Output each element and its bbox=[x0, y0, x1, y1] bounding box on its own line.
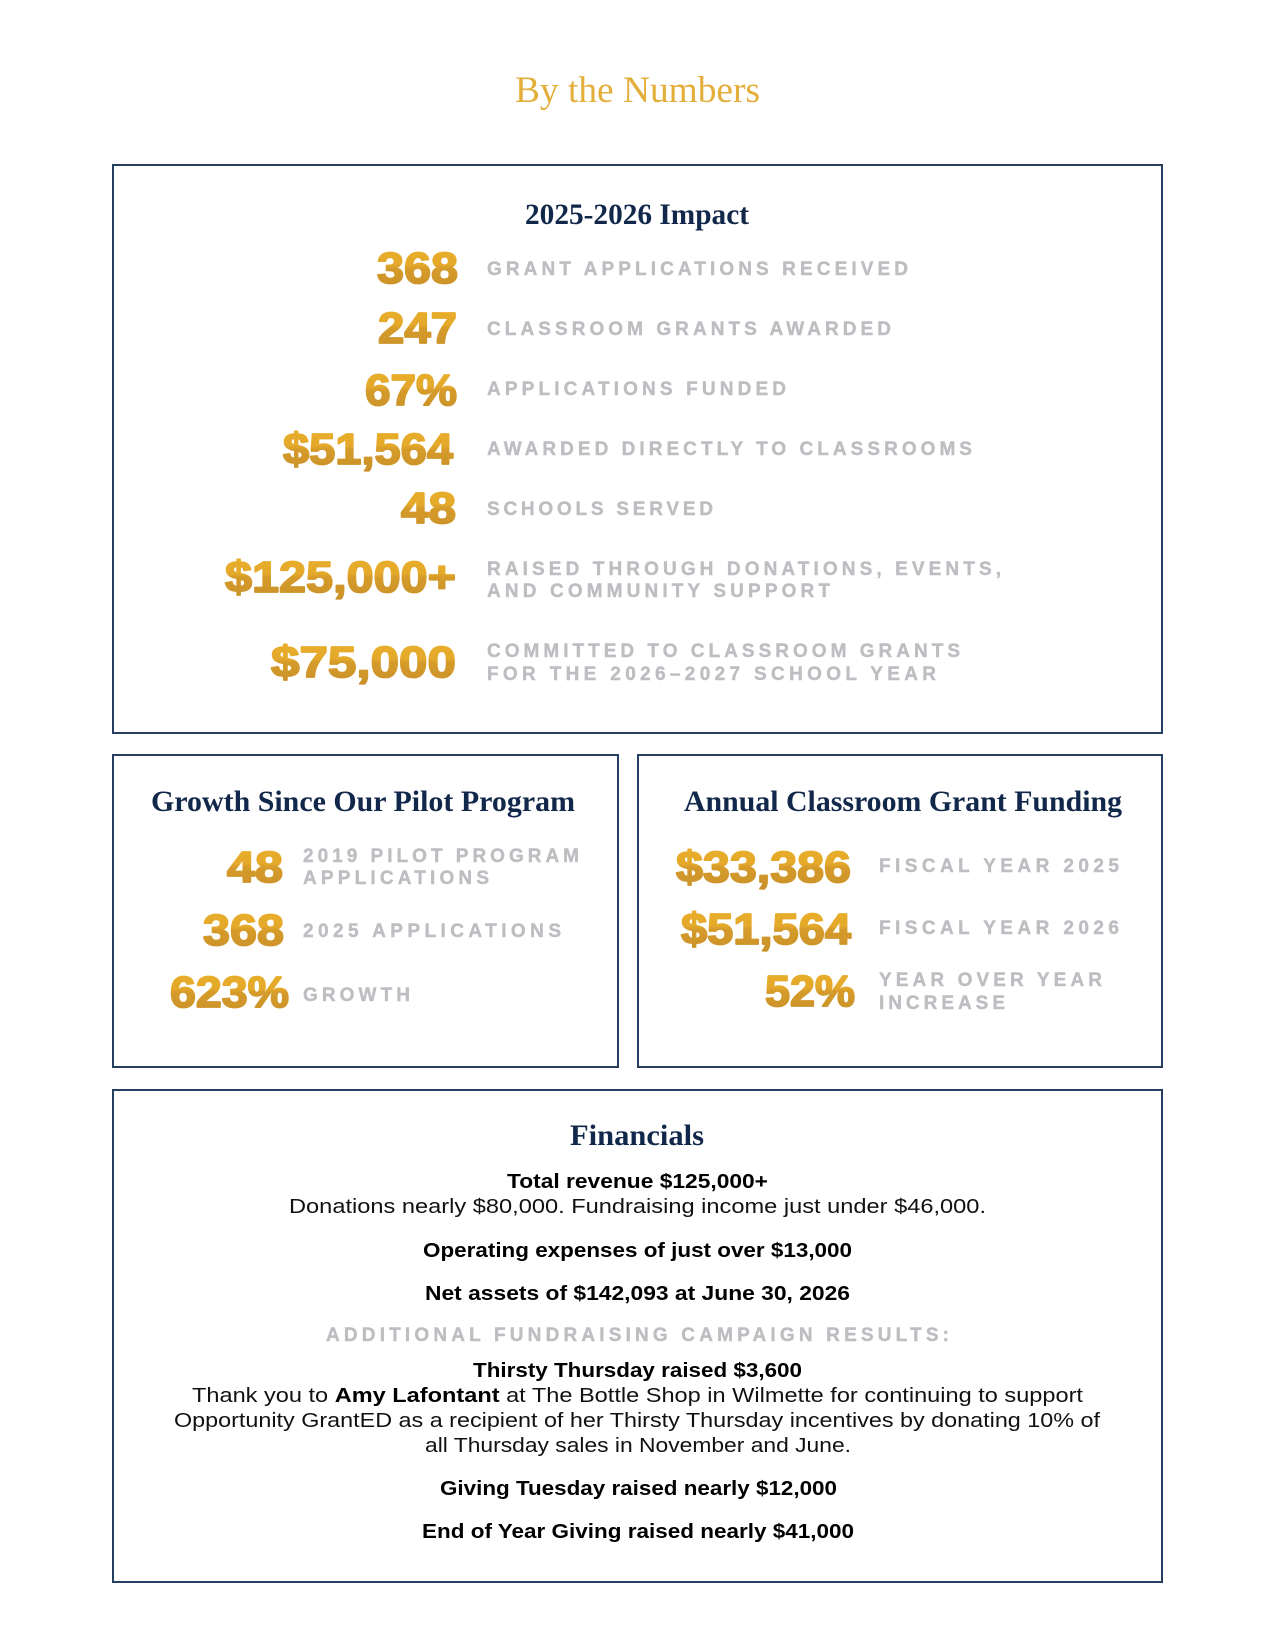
total revenue bbox=[289, 1170, 986, 1218]
heading: financials: Financials bbox=[570, 1119, 704, 1152]
stat: 48 pilot applications: 48 bbox=[227, 843, 283, 892]
stat: $125,000+ raised: $125,000+ bbox=[225, 553, 456, 602]
stat: year over year increase: 52% bbox=[765, 967, 855, 1016]
stat: fiscal year 2026: FISCAL YEAR 2026 bbox=[879, 918, 1119, 939]
stat: $75,000 committed: FOR THE 2026–2027 SCHOOL YEAR bbox=[487, 664, 936, 685]
stat: $51,564 awarded: $51,564 bbox=[283, 425, 454, 474]
stat: year over year increase: INCREASE bbox=[879, 993, 1005, 1014]
stat: 48 pilot applications: 2019 PILOT PROGRAM bbox=[303, 846, 579, 867]
total revenue: Donations nearly $80,000. Fundraising income just under $46,000. bbox=[289, 1195, 986, 1218]
stat: 368 applications bbox=[377, 244, 908, 293]
subheading: additional campaigns: ADDITIONAL FUNDRAISING CAMPAIGN RESULTS: bbox=[326, 1325, 949, 1346]
stat: 67% funded: 67% bbox=[365, 366, 457, 415]
stat: 67% funded: APPLICATIONS FUNDED bbox=[487, 379, 786, 400]
stat: 48 pilot applications bbox=[227, 843, 579, 892]
title: By the Numbers bbox=[515, 70, 760, 111]
stat: 48 pilot applications: APPLICATIONS bbox=[303, 868, 489, 889]
stat: $51,564 awarded: AWARDED DIRECTLY TO CLASSROOMS bbox=[487, 439, 972, 460]
operating expenses: Operating expenses of just over $13,000 bbox=[423, 1239, 852, 1262]
stat: $75,000 committed: COMMITTED TO CLASSROOM GRANTS bbox=[487, 641, 960, 662]
stat: 368 applications bbox=[203, 906, 561, 955]
thirsty thursday: all Thursday sales in November and June. bbox=[425, 1434, 851, 1457]
panel: 2025-2026 impact bbox=[113, 165, 1162, 733]
stat: 48 schools: 48 bbox=[401, 484, 456, 533]
stat: 623% growth: GROWTH bbox=[303, 985, 410, 1006]
stat: 368 applications: 368 bbox=[203, 906, 284, 955]
panel: growth since pilot bbox=[113, 755, 618, 1067]
end of year giving: End of Year Giving raised nearly $41,000 bbox=[422, 1520, 854, 1543]
stat: 623% growth: 623% bbox=[170, 968, 289, 1017]
stat: 67% funded bbox=[365, 366, 786, 415]
stat: $75,000 committed: $75,000 bbox=[271, 638, 456, 687]
stat: 368 applications: 2025 APPLICATIONS bbox=[303, 921, 561, 942]
stat: year over year increase: YEAR OVER YEAR bbox=[879, 970, 1102, 991]
stat: fiscal year 2025: FISCAL YEAR 2025 bbox=[879, 856, 1119, 877]
stat: fiscal year 2025: $33,386 bbox=[676, 843, 851, 892]
stat: fiscal year 2026 bbox=[681, 905, 1119, 954]
total revenue: Total revenue $125,000+ bbox=[507, 1170, 768, 1193]
stat: 247 grants: CLASSROOM GRANTS AWARDED bbox=[487, 319, 891, 340]
thirsty thursday: Opportunity GrantED as a recipient of her Thirsty Thursday incentives by donating 10% of bbox=[174, 1409, 1100, 1432]
heading: growth: Growth Since Our Pilot Program bbox=[151, 785, 575, 818]
thirsty thursday bbox=[174, 1359, 1100, 1457]
stat: 368 applications: GRANT APPLICATIONS RECEIVED bbox=[487, 259, 908, 280]
stat: $125,000+ raised bbox=[225, 553, 1001, 602]
stat: $125,000+ raised: RAISED THROUGH DONATIONS, EVENTS, bbox=[487, 559, 1001, 580]
stat: $75,000 committed bbox=[271, 638, 960, 687]
stat: $51,564 awarded bbox=[283, 425, 972, 474]
stat: 247 grants bbox=[378, 304, 891, 353]
heading: funding: Annual Classroom Grant Funding bbox=[684, 785, 1122, 818]
stat: $125,000+ raised: AND COMMUNITY SUPPORT bbox=[487, 581, 830, 602]
stat: 247 grants: 247 bbox=[378, 304, 457, 353]
stat: fiscal year 2025 bbox=[676, 843, 1119, 892]
panel: financials bbox=[113, 1090, 1162, 1582]
stat: fiscal year 2026: $51,564 bbox=[681, 905, 852, 954]
heading: impact: 2025-2026 Impact bbox=[525, 198, 749, 231]
thirsty thursday: Thirsty Thursday raised $3,600 bbox=[473, 1359, 802, 1382]
giving tuesday: Giving Tuesday raised nearly $12,000 bbox=[440, 1477, 837, 1500]
thirsty thursday: Thank you to Amy Lafontant at The Bottle Shop in Wilmette for continuing to support bbox=[192, 1384, 1083, 1407]
stat: 623% growth bbox=[170, 968, 410, 1017]
stat: 368 applications: 368 bbox=[377, 244, 458, 293]
stat: 48 schools bbox=[401, 484, 713, 533]
stat: 48 schools: SCHOOLS SERVED bbox=[487, 499, 713, 520]
net assets: Net assets of $142,093 at June 30, 2026 bbox=[425, 1282, 850, 1305]
panel: annual classroom grant funding bbox=[638, 755, 1162, 1067]
stat: year over year increase bbox=[765, 967, 1102, 1016]
